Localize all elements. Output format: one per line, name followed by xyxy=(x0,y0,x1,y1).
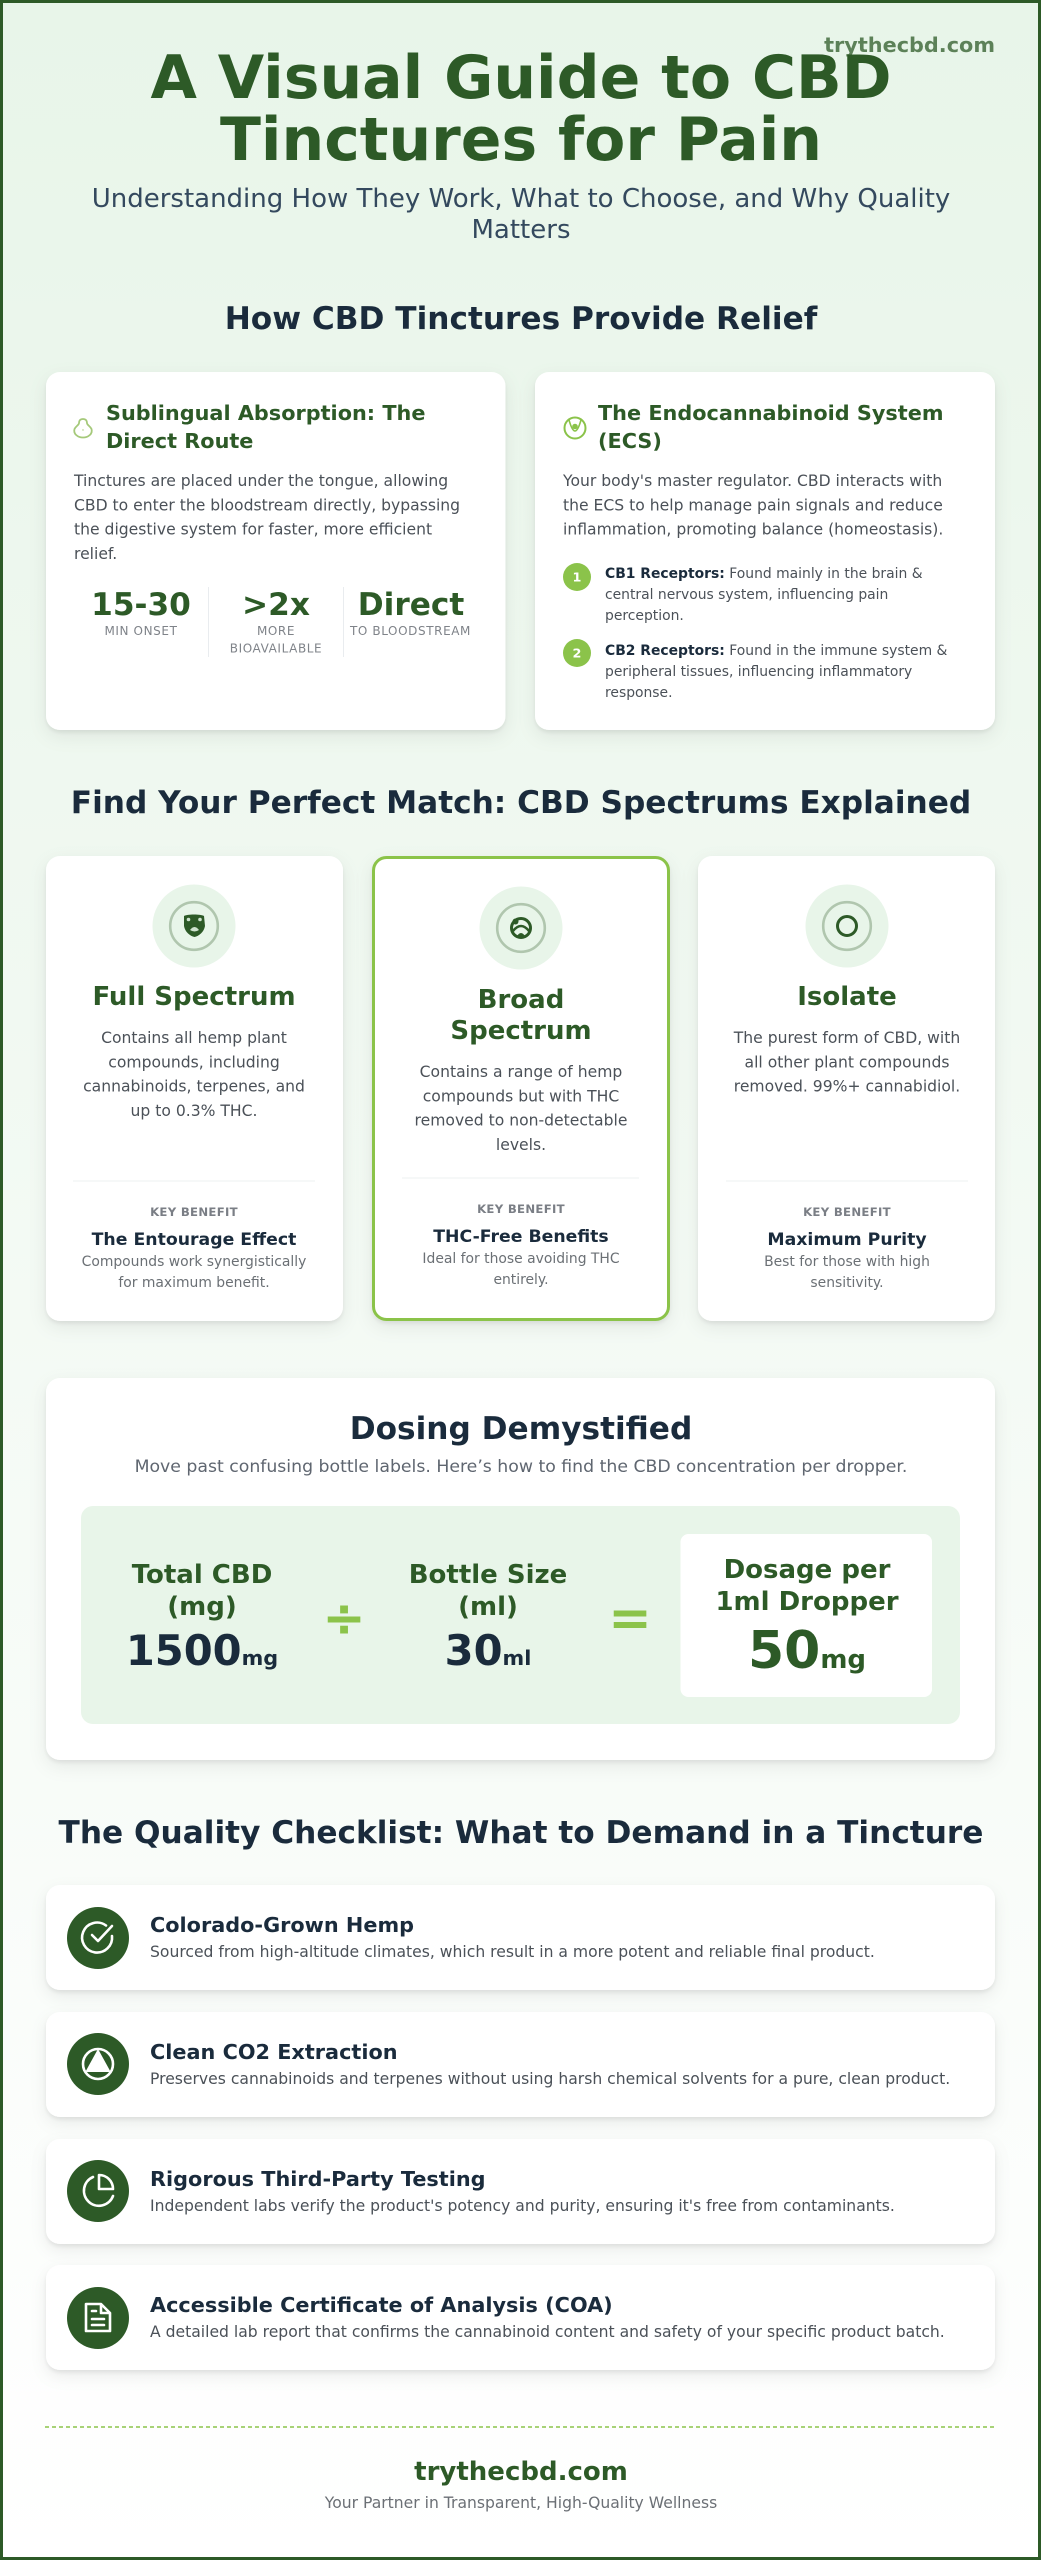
key benefit: Maximum Purity xyxy=(767,1230,927,1250)
key benefit: KEY BENEFIT xyxy=(150,1205,238,1219)
body text: CBD to enter the bloodstream directly, bypassing xyxy=(74,496,460,514)
spectrum name: Spectrum xyxy=(450,1016,592,1046)
checklist item: testing xyxy=(46,2139,995,2244)
body text: the ECS to help manage pain signals and reduce xyxy=(563,496,943,514)
panel: dosing xyxy=(46,1378,995,1760)
card heading: The Endocannabinoid System xyxy=(598,401,944,425)
card heading: Sublingual Absorption: The xyxy=(106,401,425,425)
stat: onset: MIN ONSET xyxy=(104,624,178,638)
checklist item: COA: Accessible Certificate of Analysis (COA) xyxy=(150,2293,613,2317)
icon: check xyxy=(67,1907,129,1969)
icon: pie chart xyxy=(67,2160,129,2222)
key benefit xyxy=(764,1205,930,1291)
dosing heading: Dosing Demystified xyxy=(350,1411,692,1447)
stat: bioavailability xyxy=(230,587,322,656)
checklist item: testing: Independent labs verify the product's potency and purity, ensuring it's free from contaminants. xyxy=(150,2197,895,2215)
title: Tinctures for Pain xyxy=(220,105,822,175)
stat: onset: 15-30 xyxy=(91,587,191,623)
icon: ECS xyxy=(564,418,586,438)
dosing subtitle: Move past confusing bottle labels. Here’s how to find the CBD concentration per dropper. xyxy=(135,1457,907,1477)
panel: sublingual absorption xyxy=(46,372,506,730)
description: Contains a range of hemp xyxy=(420,1063,622,1081)
checklist item: extraction xyxy=(46,2012,995,2117)
formula panel xyxy=(81,1506,960,1724)
icon: full spectrum xyxy=(152,884,236,968)
icon: broad spectrum xyxy=(480,886,562,970)
stat: bioavailability: BIOAVAILABLE xyxy=(230,642,322,656)
footer: Your Partner in Transparent, High-Quality Wellness xyxy=(324,2494,717,2512)
checklist item: hemp xyxy=(46,1885,995,1990)
spectrum name: Broad xyxy=(478,985,564,1015)
panel: broad spectrum xyxy=(374,858,668,1320)
result box: Dosage per xyxy=(724,1555,891,1585)
description: removed. 99%+ cannabidiol. xyxy=(734,1078,960,1096)
body text: relief. xyxy=(74,545,117,563)
card heading: (ECS) xyxy=(598,429,662,453)
description: cannabinoids, terpenes, and xyxy=(83,1078,305,1096)
checklist item: COA xyxy=(46,2265,995,2370)
receptor: CB1: 1 xyxy=(573,570,582,586)
panel: isolate xyxy=(698,856,995,1321)
result box: 50mg xyxy=(748,1621,866,1681)
description: compounds, including xyxy=(108,1053,280,1071)
spectrum name: Full Spectrum xyxy=(92,982,296,1012)
footer xyxy=(324,2457,717,2512)
section heading: how it works: How CBD Tinctures Provide Relief xyxy=(225,301,818,337)
bottle size: Bottle Size xyxy=(409,1560,567,1590)
receptor: CB1: CB1 Receptors: Found mainly in the brain & xyxy=(605,566,923,582)
receptor: CB1: perception. xyxy=(605,608,684,624)
key benefit: KEY BENEFIT xyxy=(803,1205,891,1219)
header xyxy=(92,33,995,245)
checklist item: hemp: Colorado-Grown Hemp xyxy=(150,1913,414,1937)
stat: bioavailability: >2x xyxy=(242,587,310,623)
icon: isolate xyxy=(806,884,888,968)
section heading: spectrums: Find Your Perfect Match: CBD Spectrums Explained xyxy=(71,785,971,821)
key benefit: Compounds work synergistically xyxy=(82,1254,306,1270)
panel: full spectrum xyxy=(46,856,343,1321)
receptor: CB2 xyxy=(563,639,948,701)
divide sign: ÷ xyxy=(322,1588,366,1648)
title: A Visual Guide to CBD xyxy=(150,43,892,113)
panel: endocannabinoid system xyxy=(535,372,995,730)
receptor: CB2: 2 xyxy=(573,646,581,662)
key benefit xyxy=(82,1205,306,1291)
bottle size xyxy=(409,1560,567,1675)
card heading: Direct Route xyxy=(106,429,253,453)
equals sign: = xyxy=(608,1588,652,1648)
description: Contains all hemp plant xyxy=(101,1029,287,1047)
stat: direct xyxy=(349,587,471,638)
description: compounds but with THC xyxy=(423,1087,619,1105)
key benefit: Best for those with high xyxy=(764,1254,930,1270)
stat: direct: Direct xyxy=(358,587,464,623)
description: removed to non-detectable xyxy=(415,1112,627,1130)
description: up to 0.3% THC. xyxy=(130,1102,258,1120)
section heading: checklist: The Quality Checklist: What to Demand in a Tincture xyxy=(59,1815,983,1851)
total CBD xyxy=(126,1560,278,1675)
body text: Tinctures are placed under the tongue, allowing xyxy=(73,472,448,490)
bottle size: (ml) xyxy=(458,1592,518,1622)
checklist item: extraction: Preserves cannabinoids and terpenes without using harsh chemical solvents for a pure, clean product. xyxy=(150,2070,950,2088)
receptor: CB2: response. xyxy=(605,685,673,701)
key benefit: KEY BENEFIT xyxy=(477,1202,565,1216)
body text: inflammation, promoting balance (homeostasis). xyxy=(563,521,943,539)
checklist item: testing: Rigorous Third-Party Testing xyxy=(150,2167,486,2191)
subtitle: Matters xyxy=(472,215,570,245)
checklist item: hemp: Sourced from high-altitude climates, which result in a more potent and reliable final product. xyxy=(150,1943,875,1961)
receptor: CB1: central nervous system, influencing pain xyxy=(605,587,888,603)
key benefit xyxy=(422,1202,620,1288)
receptor: CB2: peripheral tissues, influencing inflammatory xyxy=(605,664,912,680)
receptor: CB1 xyxy=(563,563,923,624)
description: all other plant compounds xyxy=(745,1053,949,1071)
result box: 1ml Dropper xyxy=(715,1587,899,1617)
icon: drop xyxy=(74,419,92,438)
description: levels. xyxy=(496,1136,546,1154)
watermark brand: trythecbd.com xyxy=(824,33,995,57)
stat: bioavailability: MORE xyxy=(257,624,295,638)
total CBD: 1500mg xyxy=(126,1626,278,1675)
receptor: CB2: CB2 Receptors: Found in the immune system & xyxy=(605,643,947,659)
key benefit: The Entourage Effect xyxy=(92,1230,296,1250)
icon: triangle xyxy=(67,2033,129,2095)
body text: Your body's master regulator. CBD interacts with xyxy=(562,472,942,490)
bottle size: 30ml xyxy=(445,1626,531,1675)
key benefit: Ideal for those avoiding THC xyxy=(422,1251,620,1267)
subtitle: Understanding How They Work, What to Choose, and Why Quality xyxy=(92,184,950,214)
body text: the digestive system for faster, more efficient xyxy=(74,521,432,539)
checklist item: extraction: Clean CO2 Extraction xyxy=(150,2040,398,2064)
total CBD: (mg) xyxy=(167,1592,237,1622)
key benefit: for maximum benefit. xyxy=(118,1275,270,1291)
key benefit: entirely. xyxy=(493,1272,549,1288)
key benefit: sensitivity. xyxy=(810,1275,884,1291)
stat: direct: TO BLOODSTREAM xyxy=(349,624,471,638)
spectrum name: Isolate xyxy=(797,982,897,1012)
footer: trythecbd.com xyxy=(414,2457,628,2487)
checklist item: COA: A detailed lab report that confirms the cannabinoid content and safety of your specific product batch. xyxy=(150,2323,945,2341)
description: The purest form of CBD, with xyxy=(733,1029,960,1047)
result box xyxy=(680,1534,932,1697)
total CBD: Total CBD xyxy=(132,1560,272,1590)
key benefit: THC-Free Benefits xyxy=(433,1227,609,1247)
icon: document xyxy=(67,2287,129,2349)
